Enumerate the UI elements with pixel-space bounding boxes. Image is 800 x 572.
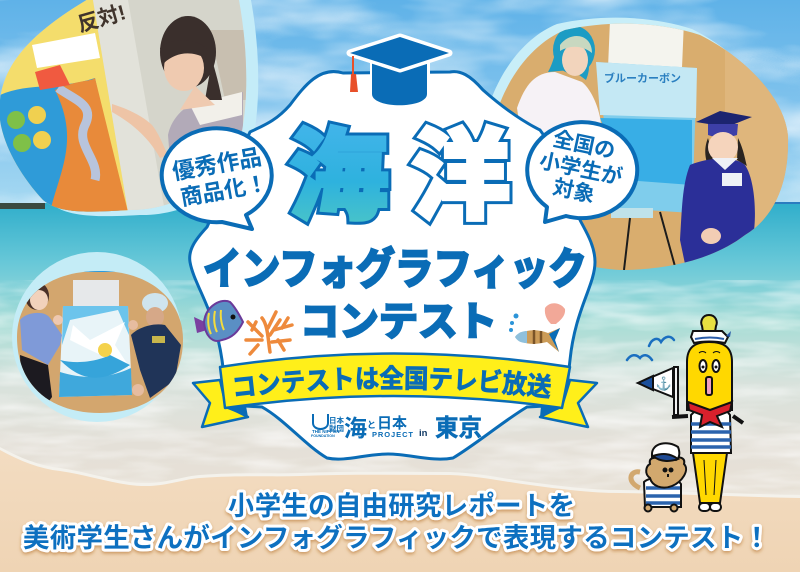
panel: white title plaque xyxy=(190,72,595,459)
title: ocean kanji: 洋 xyxy=(412,122,510,231)
icon: tropical fish xyxy=(194,301,243,341)
logos: sponsor and location: 財団 xyxy=(329,423,344,433)
caption: line one: 小学生の自由研究レポートを xyxy=(228,491,575,521)
logos: sponsor and location: と xyxy=(367,420,376,430)
poster title: 反対! xyxy=(75,1,128,37)
photo: student and artist with poster (top right) xyxy=(490,18,800,280)
icon: seashell xyxy=(545,303,565,324)
speech bubble: target students xyxy=(527,122,637,222)
poster heading: ブルーカーボン xyxy=(604,71,681,85)
logos: sponsor and location: THE NIPPON xyxy=(312,429,340,434)
banner text: コンテストは全国テレビ放送 xyxy=(234,364,551,399)
pennant flag: ⚓ xyxy=(656,376,672,391)
logos: sponsor and location: 日本 xyxy=(377,415,407,432)
logos: sponsor and location: 東京 xyxy=(435,415,482,442)
title: infographic: インフォグラフィック xyxy=(203,246,587,294)
speech bubble: outstanding works: 商品化！ xyxy=(179,171,270,210)
title: ocean kanji xyxy=(290,122,510,231)
speech bubble: outstanding works: 優秀作品 xyxy=(170,144,263,185)
photo: girl with poster (top left) xyxy=(0,0,258,216)
pennant flag xyxy=(638,367,678,415)
photo: artist and student with poster (bottom left) xyxy=(12,252,183,422)
icon: graduation cap xyxy=(350,37,449,108)
title: ocean kanji: 海 xyxy=(290,122,388,231)
speech bubble: target students: 対象 xyxy=(551,176,597,207)
logos: sponsor and location: 日本 xyxy=(329,415,344,425)
icon: coral xyxy=(246,312,292,354)
speech bubble: outstanding works xyxy=(162,128,272,229)
logos: sponsor and location: PROJECT xyxy=(372,430,413,439)
banner: yellow ribbon xyxy=(192,352,598,428)
character: sailor dog xyxy=(631,443,686,512)
logos: sponsor and location xyxy=(311,414,482,442)
icon: seagulls xyxy=(627,337,674,360)
caption: line two: 美術学生さんがインフォグラフィックで表現するコンテスト！ xyxy=(23,523,770,553)
logos: sponsor and location: 海 xyxy=(344,415,367,441)
logos: sponsor and location: FOUNDATION xyxy=(311,434,335,438)
speech bubble: target students: 全国の xyxy=(551,128,617,163)
logos: sponsor and location: in xyxy=(419,428,428,439)
character: yellow mascot with flag xyxy=(638,315,743,511)
title: contest: コンテスト xyxy=(300,300,497,344)
icon: striped fish with bubbles xyxy=(509,314,560,352)
speech bubble: target students: 小学生が xyxy=(537,149,624,189)
title: ocean kanji: 海 xyxy=(290,122,388,231)
title: ocean kanji: 洋 xyxy=(412,122,510,231)
